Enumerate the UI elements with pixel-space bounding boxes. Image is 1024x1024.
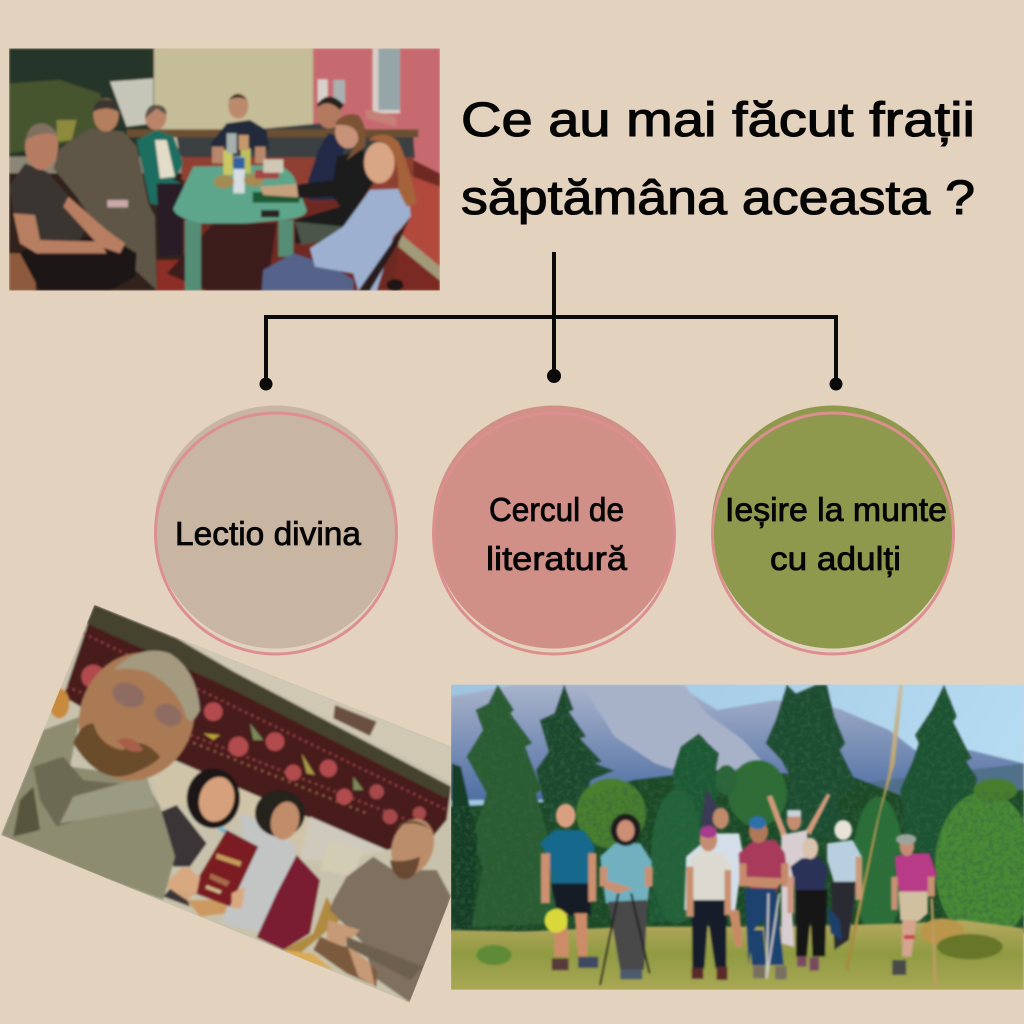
hiker: woman in light blue top — [599, 814, 653, 985]
hiker: man in blue T-shirt — [540, 804, 598, 970]
connector tree with three branches — [260, 252, 842, 390]
leafy bushes — [576, 778, 646, 848]
tapestry — [63, 605, 451, 850]
flag behind group — [701, 788, 717, 827]
chair — [322, 856, 360, 874]
photo: selfie with the Bible in front of a tapestry — [1, 604, 452, 1002]
circle: Cercul de literatură: Cercul de — [489, 491, 624, 528]
hill of trees and bushes — [450, 770, 1024, 933]
person: man in black t-shirt — [211, 93, 269, 163]
hiker: older woman in striped shirt — [788, 838, 842, 971]
person: man with hood at left — [53, 98, 157, 290]
woman with dark hair — [157, 768, 243, 917]
circle: Ieșire la munte cu adulți — [712, 406, 954, 654]
photo: group at the table on the terrace — [9, 48, 440, 291]
big man selfie: hood — [1, 649, 202, 900]
friar with beard — [313, 813, 451, 1003]
meadow — [450, 920, 1024, 995]
circle: Ieșire la munte cu adulți: cu adulți — [770, 540, 901, 577]
hiker: man with arms raised — [767, 793, 831, 947]
person: man in dark shirt — [308, 97, 344, 200]
hiker: woman with purple hat — [686, 826, 731, 980]
circle: Lectio divina: Lectio divina — [175, 515, 362, 552]
fir trees — [535, 684, 614, 804]
circle: Cercul de literatură — [432, 406, 676, 654]
person: woman in blue blouse at front right — [262, 135, 417, 291]
photo: hiking group with mountains — [450, 680, 1024, 995]
circle: Cercul de literatură: literatură — [486, 540, 628, 577]
title: Ce au mai făcut frații — [461, 94, 975, 147]
wall under tapestry and sofa — [155, 766, 308, 842]
person: woman at back — [137, 105, 183, 257]
title: săptămâna aceasta ? — [461, 172, 975, 225]
hiker: woman in magenta — [891, 834, 937, 988]
circle: Ieșire la munte cu adulți: Ieșire la munte — [725, 491, 947, 528]
face — [77, 651, 196, 781]
tall grass stalk — [845, 685, 903, 970]
mountains — [450, 685, 1024, 800]
hiker: man in maroon T-shirt — [738, 816, 789, 979]
foliage texture — [451, 685, 1024, 935]
book: Biblia — [167, 827, 258, 908]
hiker: woman in light blue — [827, 820, 862, 950]
woman in light shirt — [222, 790, 320, 950]
person: woman in black sweater — [260, 114, 373, 245]
person: man in grey t-shirt at front left — [9, 123, 137, 291]
circle: Lectio divina — [154, 406, 398, 654]
table with bottles and bowls — [173, 133, 307, 291]
hiker: man in white tee — [684, 808, 743, 947]
title — [461, 94, 975, 225]
